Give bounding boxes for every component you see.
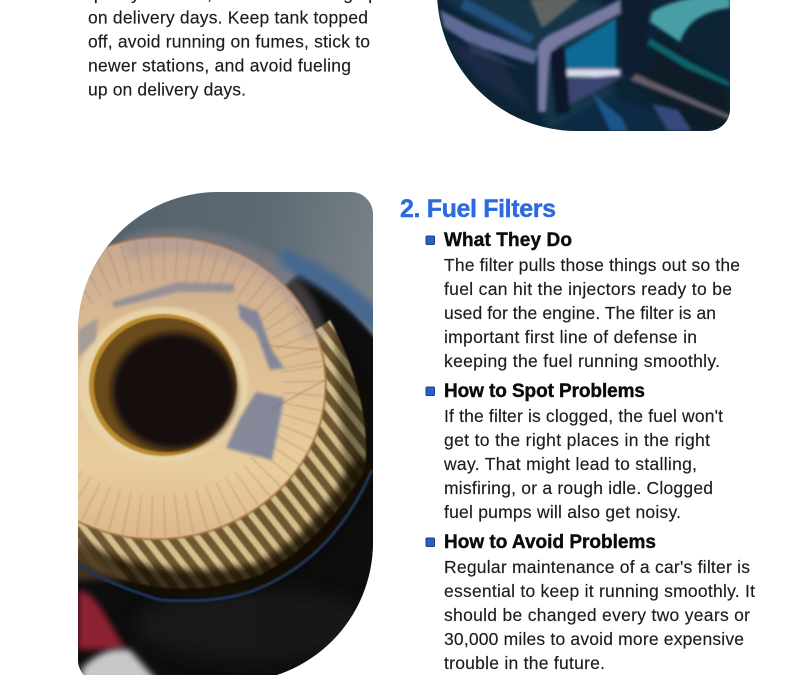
text block: fuel quality advice (continued) bbox=[88, 0, 378, 100]
image: oil filter photo bbox=[78, 192, 373, 675]
text block: fuel quality advice (continued): up on delivery days. bbox=[88, 80, 246, 100]
bullet bbox=[426, 387, 434, 396]
text block: fuel quality advice (continued): newer stations, and avoid fueling bbox=[88, 56, 351, 76]
printed markings on filter bbox=[78, 282, 284, 460]
filter top disc bbox=[78, 227, 328, 541]
section: What They Do: The filter pulls those things out so the bbox=[444, 255, 740, 275]
section: How to Spot Problems bbox=[426, 381, 723, 522]
section: How to Avoid Problems: trouble in the future. bbox=[444, 653, 605, 673]
section: How to Avoid Problems bbox=[426, 532, 755, 673]
heading: 2. Fuel Filters: 2. Fuel Filters bbox=[400, 195, 556, 223]
section: What They Do bbox=[426, 230, 740, 371]
section: How to Spot Problems: get to the right places in the right bbox=[444, 430, 710, 450]
section: How to Spot Problems: fuel pumps will also get noisy. bbox=[444, 502, 681, 522]
pleated filter side bbox=[70, 320, 372, 589]
section: How to Spot Problems: way. That might lead to stalling, bbox=[443, 454, 697, 474]
section: How to Avoid Problems: How to Avoid Problems bbox=[444, 532, 656, 553]
section: What They Do: important first line of defense in bbox=[444, 327, 697, 347]
section: How to Spot Problems: If the filter is clogged, the fuel won't bbox=[444, 406, 723, 426]
text block: fuel quality advice (continued): on delivery days. Keep tank topped bbox=[88, 8, 368, 28]
section: How to Spot Problems: How to Spot Problems bbox=[444, 381, 645, 402]
section: What They Do: keeping the fuel running smoothly. bbox=[444, 351, 720, 371]
section: What They Do: used for the engine. The filter is an bbox=[444, 303, 716, 323]
section: How to Spot Problems: misfiring, or a rough idle. Clogged bbox=[444, 478, 713, 498]
photo background bbox=[70, 185, 380, 675]
dark filter housing bbox=[70, 258, 380, 675]
section: What They Do: What They Do bbox=[444, 230, 572, 251]
section: What They Do: fuel can hit the injectors ready to be bbox=[444, 279, 732, 299]
blue rim of housing bbox=[72, 470, 372, 601]
section: How to Avoid Problems: essential to keep it running smoothly. It bbox=[444, 581, 755, 601]
bullet bbox=[426, 236, 434, 244]
section: How to Avoid Problems: Regular maintenance of a car's filter is bbox=[444, 557, 750, 577]
section: How to Avoid Problems: 30,000 miles to avoid more expensive bbox=[444, 629, 744, 649]
image: engine close-up bbox=[430, 0, 735, 135]
text block: fuel quality advice (continued): off, avoid running on fumes, stick to bbox=[88, 32, 370, 52]
bullet bbox=[426, 538, 434, 546]
section: How to Avoid Problems: should be changed every two years or bbox=[444, 605, 750, 625]
